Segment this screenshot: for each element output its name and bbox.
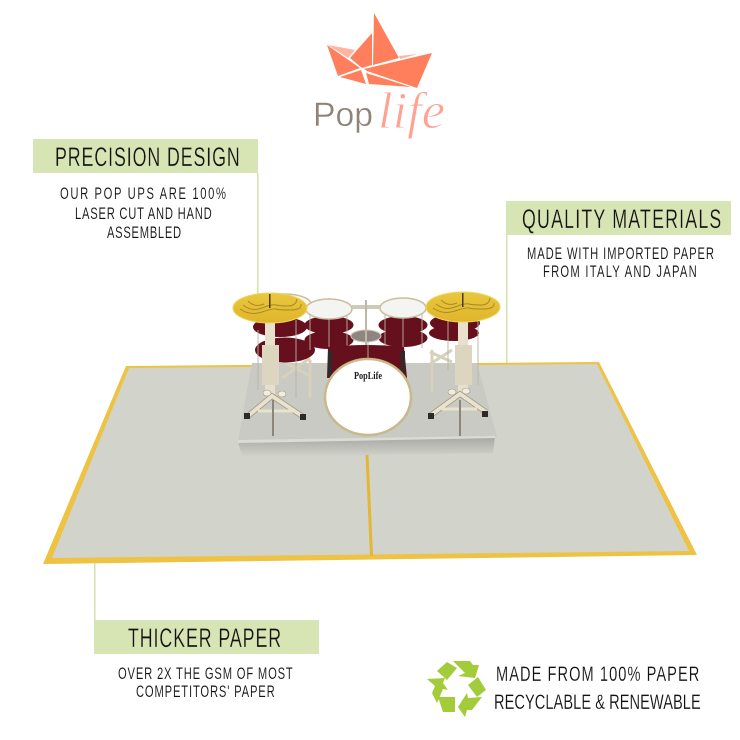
callout lines — [94, 173, 508, 620]
centre tom stacks — [304, 316, 428, 349]
right cymbal — [426, 292, 500, 322]
callout: thicker paper — [94, 620, 319, 701]
left tom discs — [253, 317, 315, 362]
bass drum head: PopLife — [354, 371, 382, 382]
centre mount — [351, 300, 381, 350]
centre fold — [365, 443, 373, 556]
logo wordmark: Pop — [313, 96, 373, 134]
logo: Poplife paper boat — [313, 13, 445, 140]
left cymbal stand — [244, 322, 306, 436]
callout: quality materials: MADE WITH IMPORTED PAPER — [527, 244, 714, 263]
logo wordmark: life — [378, 83, 445, 140]
bass drum head — [325, 359, 411, 435]
bass drum shell — [327, 342, 407, 378]
card base: open card with yellow edge — [43, 362, 697, 564]
icon: recycling symbol — [427, 661, 486, 717]
text: recyclable statement — [494, 661, 701, 714]
right tom discs — [429, 314, 480, 341]
callout: precision design: ASSEMBLED — [107, 223, 181, 242]
icon: paper boat — [327, 13, 432, 88]
callout: quality materials — [506, 201, 731, 281]
tom poles — [258, 298, 478, 398]
tom heads — [257, 294, 426, 319]
callout: precision design: OUR POP UPS ARE 100% — [60, 184, 226, 203]
callout: precision design — [33, 139, 258, 242]
callout: quality materials: QUALITY MATERIALS — [522, 203, 721, 234]
stage platform — [238, 363, 497, 457]
illustration: drum kit pop up — [233, 292, 500, 457]
right cymbal stand — [428, 320, 488, 436]
logo wordmark — [313, 83, 445, 140]
callout: precision design: LASER CUT AND HAND — [75, 204, 212, 223]
text: recyclable statement: RECYCLABLE & RENEWABLE — [494, 689, 701, 714]
left cymbal — [233, 293, 307, 323]
callout: thicker paper: THICKER PAPER — [128, 622, 281, 653]
callout: quality materials: FROM ITALY AND JAPAN — [543, 262, 697, 281]
callout: thicker paper: OVER 2X THE GSM OF MOST — [118, 664, 293, 683]
callout: thicker paper: COMPETITORS' PAPER — [136, 682, 275, 701]
text: recyclable statement: MADE FROM 100% PAPER — [496, 661, 699, 686]
callout: precision design: PRECISION DESIGN — [55, 141, 240, 172]
rear legs and braces — [280, 350, 452, 398]
